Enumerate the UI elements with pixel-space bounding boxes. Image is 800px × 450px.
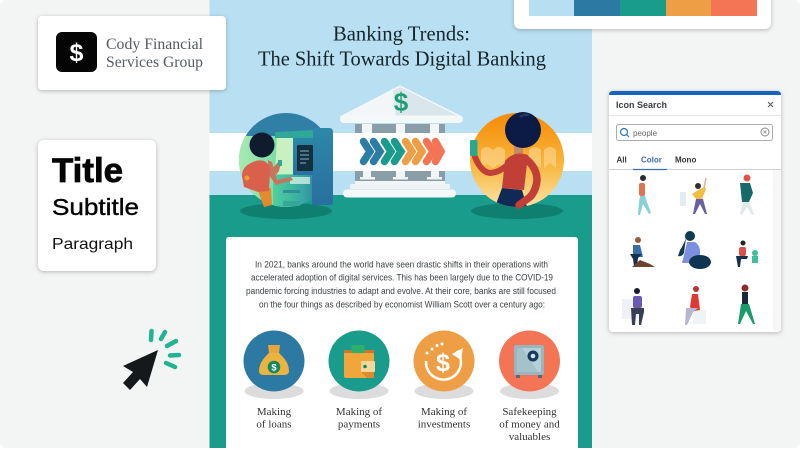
item: safekeeping of money and valuables xyxy=(499,330,560,443)
icon: dollar logo xyxy=(56,32,97,72)
person body xyxy=(257,188,272,207)
heading: poster title xyxy=(258,22,546,70)
item: making of payments xyxy=(328,330,390,430)
item: safekeeping of money and valuables: Safekeeping xyxy=(502,406,557,418)
item: making of loans xyxy=(244,330,304,430)
item: making of loans: Making xyxy=(257,406,292,418)
text block: intro paragraph: accelerated adoption of digital services. This has been largely due to the COVID-19 xyxy=(251,272,553,284)
item: making of loans: of loans xyxy=(256,418,292,430)
icon: close xyxy=(768,102,773,107)
item: making of investments: Making of xyxy=(421,406,467,418)
person 5 xyxy=(678,231,711,269)
text: company name: Cody Financial xyxy=(106,36,203,53)
icon: dollar logo: $ xyxy=(70,39,84,67)
text: company name xyxy=(106,36,203,71)
tabs: Mono xyxy=(675,156,696,164)
icon: green dollar sign: $ xyxy=(394,87,409,117)
item: making of payments: Making of xyxy=(336,406,382,418)
illustration: person with smartphone xyxy=(470,112,564,219)
icon: dollar with circular arrow: $ xyxy=(436,349,450,377)
person 7 xyxy=(622,288,644,325)
tabs xyxy=(609,156,781,170)
illustration: person at ATM xyxy=(239,113,333,219)
chevrons xyxy=(364,142,441,162)
person 2 xyxy=(680,178,707,214)
illustration: bank building with chevrons xyxy=(340,87,463,198)
heading: poster title: The Shift Towards Digital Banking xyxy=(258,46,546,70)
icon: mouse cursor with click sparks xyxy=(123,331,179,390)
item: making of investments: investments xyxy=(418,418,470,430)
item: making of payments: payments xyxy=(338,418,380,430)
panel: icon search window xyxy=(609,91,781,332)
panel: colour palette card xyxy=(514,0,771,29)
panel: infographic poster xyxy=(210,0,592,450)
panel: text styles card: Paragraph xyxy=(52,236,133,253)
text: company name: Services Group xyxy=(106,54,203,71)
person 9 xyxy=(738,284,755,324)
item: safekeeping of money and valuables: of money and xyxy=(499,418,560,430)
panel: text styles card xyxy=(38,140,156,271)
panel: text styles card: Title xyxy=(52,152,123,190)
icon: wallet xyxy=(344,345,375,378)
text block: intro paragraph: pandemic forcing industries to adapt and evolve. At their core, banks are still focused xyxy=(246,286,556,297)
search box xyxy=(616,124,772,140)
person 1 xyxy=(638,175,651,215)
tabs: Color xyxy=(641,156,662,164)
person 4 xyxy=(630,237,655,267)
icon: safe xyxy=(514,345,544,378)
panel: text styles card: Subtitle xyxy=(52,194,139,220)
tabs: All xyxy=(616,156,627,164)
text block: intro paragraph xyxy=(246,260,556,310)
person 3 xyxy=(740,174,754,215)
colour swatches xyxy=(529,0,757,16)
item: safekeeping of money and valuables: valuables xyxy=(509,431,550,443)
person 8 xyxy=(685,286,706,325)
person 6 xyxy=(736,240,758,267)
icon grid: people illustrations xyxy=(622,174,758,325)
panel: logo card xyxy=(38,16,226,90)
text block: intro paragraph: In 2021, banks around the world have seen drastic shifts in their operations with xyxy=(255,260,548,270)
heading: poster title: Banking Trends: xyxy=(333,22,470,46)
item: making of investments xyxy=(414,330,474,430)
text block: intro paragraph: on the four things as described by economist William Scott over a century ago: xyxy=(259,300,545,310)
search box: people xyxy=(633,129,658,138)
icon: money bag: $ xyxy=(271,362,277,374)
heading: icon search: Icon Search xyxy=(616,100,667,110)
panel: intro content card xyxy=(226,237,578,450)
